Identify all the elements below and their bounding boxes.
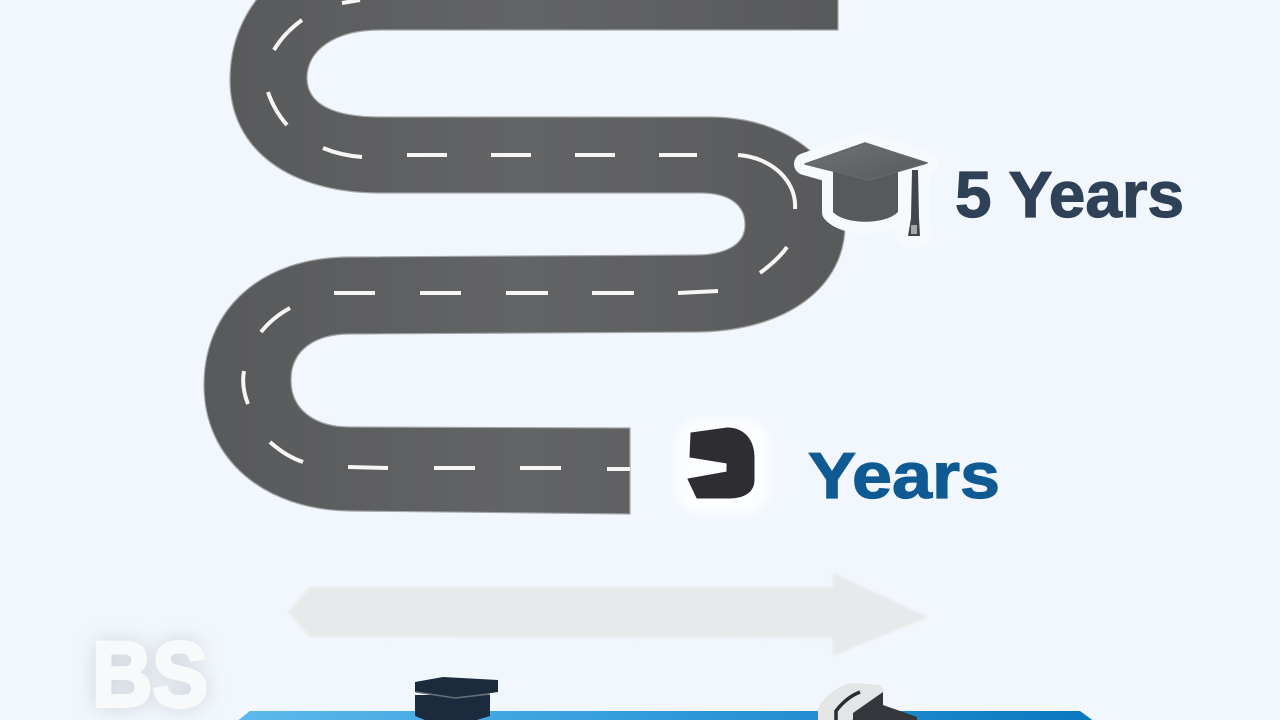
cap highlight (416, 692, 490, 698)
cap board (415, 677, 498, 698)
label: BS (92, 622, 208, 720)
badge light side (818, 683, 884, 720)
icon: dark graduation cap on platform (415, 677, 498, 720)
tassel (908, 170, 920, 236)
winding road (204, 0, 845, 514)
label: Years: Years (808, 439, 1000, 512)
blue platform (236, 711, 1095, 720)
label: 5 Years: 5 Years (955, 158, 1184, 231)
icon: graduation cap at 5 years (805, 143, 927, 236)
cap halo (805, 143, 927, 236)
badge halo (674, 418, 770, 514)
cap board (805, 143, 927, 180)
icon: badge on platform (818, 683, 917, 720)
lane markings (243, 0, 795, 469)
road surface (204, 0, 845, 514)
badge dark side (853, 692, 917, 720)
icon: partial badge at start (674, 418, 770, 514)
arrow: progress (288, 573, 928, 656)
cap body (415, 695, 490, 720)
badge stripe (836, 692, 860, 720)
badge glyph (688, 428, 754, 498)
cap base (833, 170, 898, 222)
